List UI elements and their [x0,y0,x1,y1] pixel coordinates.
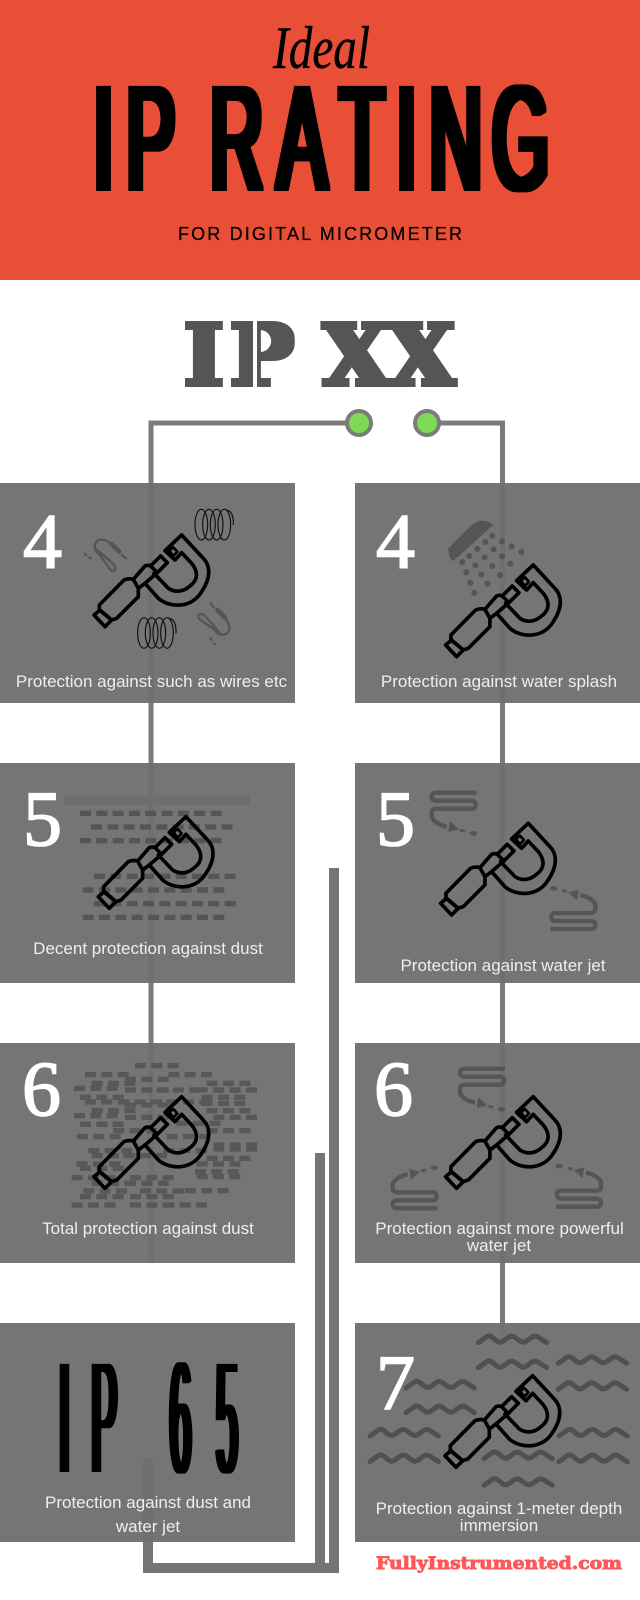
caption: Total protection against dust [42,1219,254,1238]
icon: micrometer with dense dust [72,1063,257,1208]
icon: micrometer with dust rows [80,811,236,920]
script word: Ideal: Ideal [272,15,370,81]
footer source credit: FullyInstrumented.com [376,1554,622,1574]
icon: micrometer with three water jets [393,1069,601,1208]
green dot right [415,411,439,435]
connector: double bars at bottom [143,868,339,1573]
header banner [0,0,640,280]
connector: right line from green dot [415,411,502,1335]
panel: IP 65 verdict [0,1323,295,1542]
connector: left line from green dot [151,411,371,1263]
panel: water level 5 [355,763,640,983]
caption: Protection against such as wires etc [16,672,288,691]
panel: water level 4 [355,483,640,703]
panel: dust level 6 [0,1043,295,1263]
green dot left [347,411,371,435]
number 7: 7 [376,1339,415,1426]
main title: IP RATING [93,56,549,221]
IP XX code heading: IP XX [184,306,455,406]
caption: immersion [460,1516,538,1535]
number 4: 4 [376,498,415,585]
panel: water level 6 [355,1043,640,1263]
big rating: IP 65: IP 65 [59,1328,238,1510]
subtitle: FOR DIGITAL MICROMETER [178,224,462,244]
number 5: 5 [23,775,62,862]
number 6: 6 [374,1045,413,1132]
caption: water jet [115,1517,180,1536]
caption: Decent protection against dust [33,939,263,958]
caption: Protection against 1-meter depth [376,1499,622,1518]
icon: micrometer with water jets [432,793,595,929]
caption: Protection against more powerful [375,1219,624,1238]
caption: Protection against water jet [400,956,606,975]
icon: micrometer with shower head [446,521,560,657]
number 4: 4 [23,498,62,585]
icon: micrometer with waves [370,1336,627,1485]
number 6: 6 [22,1045,61,1132]
panel: water level 7 [355,1323,640,1542]
icon: micrometer with wires and coils [85,509,233,648]
panel: dust level 5 [0,763,295,983]
number 5: 5 [376,775,415,862]
caption: Protection against water splash [381,672,617,691]
caption: Protection against dust and [45,1493,251,1512]
caption: water jet [466,1236,531,1255]
panel: dust level 4 [0,483,295,703]
